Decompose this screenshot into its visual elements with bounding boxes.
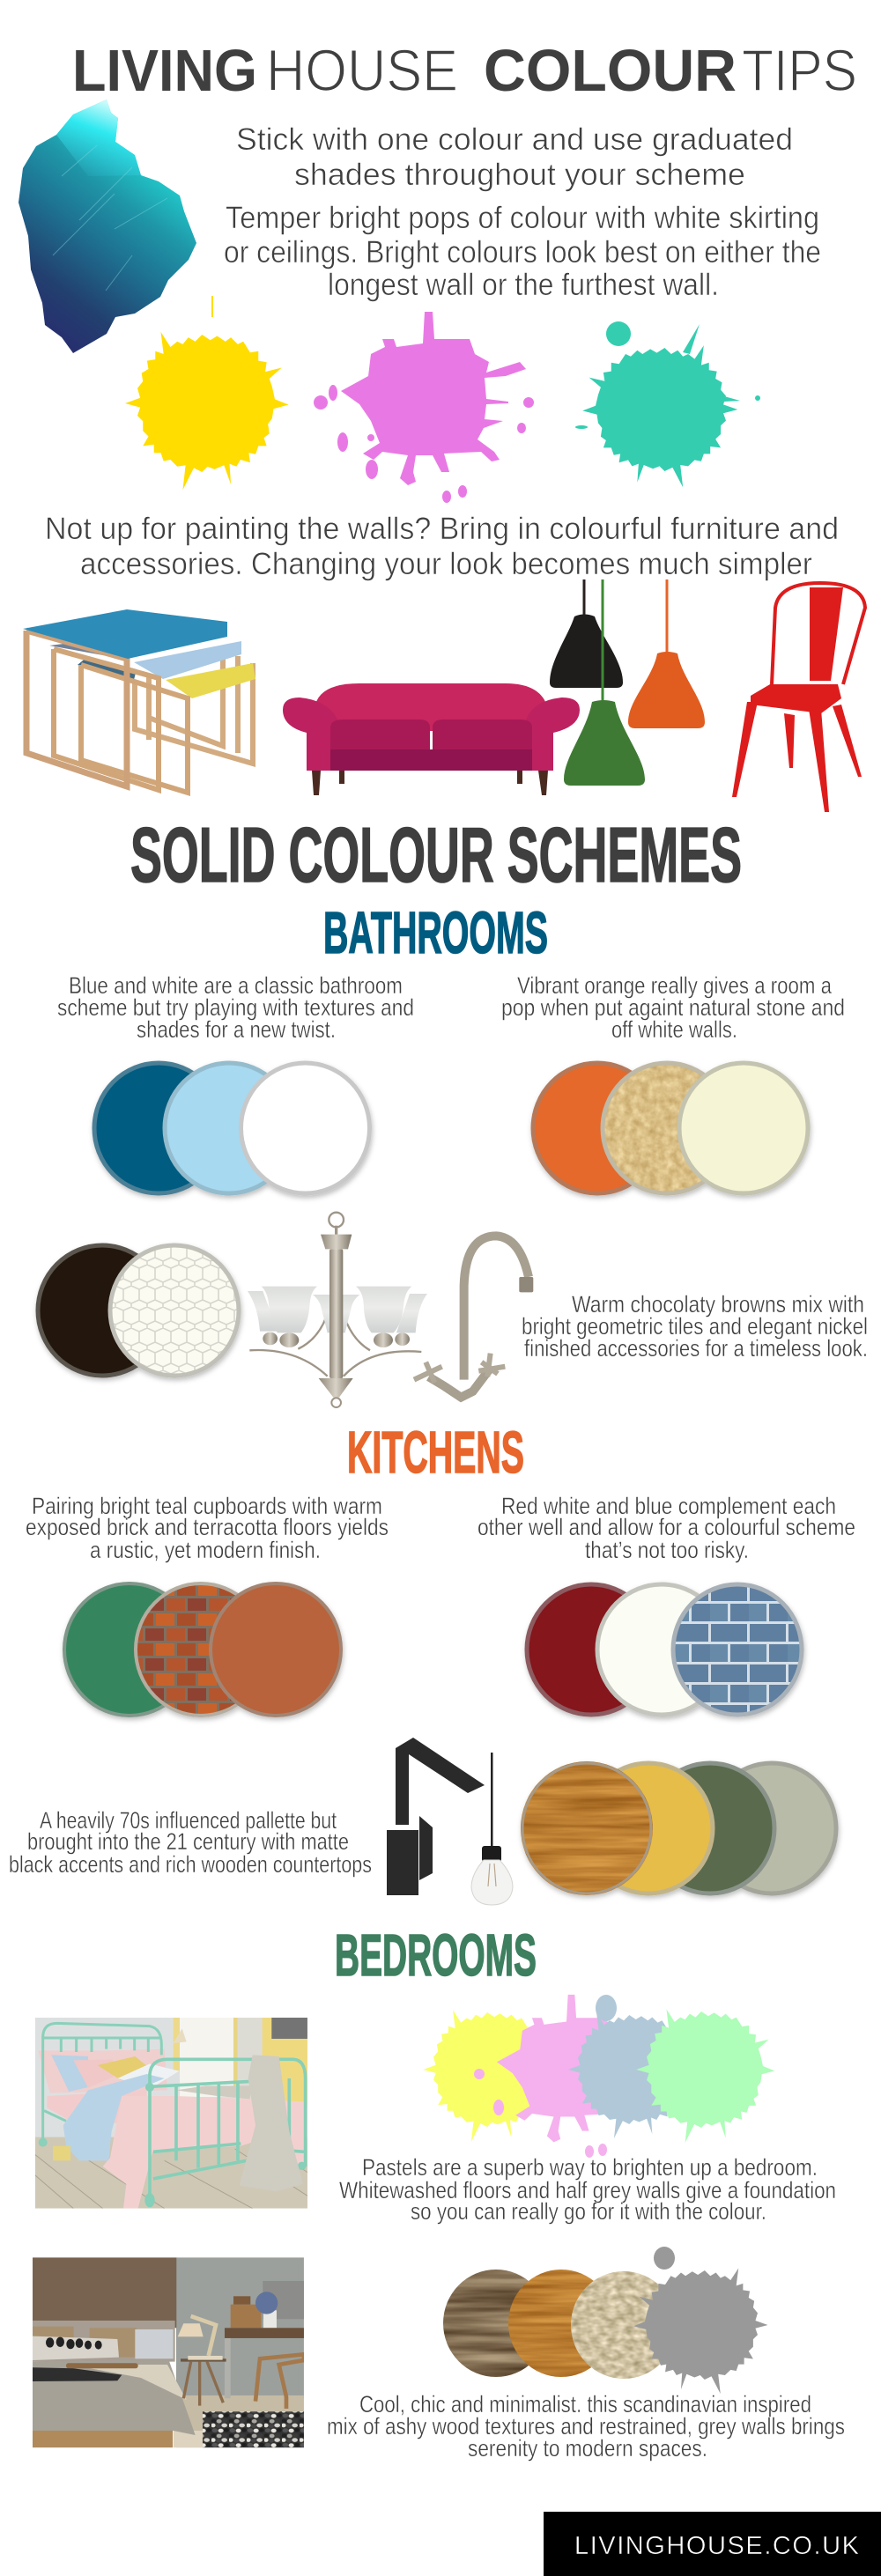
swatches: teal brick terracotta — [64, 1583, 341, 1716]
illustration: nesting tables — [23, 609, 255, 793]
text: teal cupboards: exposed brick and terracotta floors yields — [26, 1514, 389, 1540]
icon: yellow paint splat — [125, 296, 289, 490]
text: blue and white: scheme but try playing with textures and — [57, 994, 414, 1021]
swatches: pastel paint splats — [423, 1995, 774, 2158]
text: tip one colour: Stick with one colour and use graduated — [236, 122, 793, 157]
text: furniture tip: accessories. Changing your look becomes much simpler — [80, 547, 812, 581]
title: COLOUR — [484, 38, 737, 104]
illustration: green pendant lamp — [564, 579, 645, 786]
text: warm chocolaty browns — [522, 1291, 868, 1362]
title: TIPS — [742, 38, 857, 104]
footer: website badge: LIVINGHOUSE.CO.UK — [574, 2532, 860, 2560]
illustration: nickel tap — [414, 1236, 533, 1398]
illustration: black faucet — [387, 1738, 485, 1895]
swatches: wood wool grey splat — [443, 2247, 768, 2394]
footer: website badge — [544, 2512, 881, 2576]
text: vibrant orange — [501, 972, 845, 1043]
swatches: wood yellow green sage — [520, 1761, 836, 1895]
text: teal cupboards: Pairing bright teal cupboards with warm — [32, 1493, 382, 1519]
text: red white blue: that’s not too risky. — [585, 1537, 749, 1563]
text: tip one colour: shades throughout your scheme — [294, 158, 745, 192]
text: tip bright pops: Temper bright pops of colour with white skirting — [226, 201, 819, 235]
illustration: orange pendant lamp — [628, 579, 705, 728]
swatches: blue and white — [94, 1063, 370, 1193]
text: red white blue — [478, 1493, 855, 1563]
swatches: orange stone cream — [533, 1060, 808, 1196]
text: pastels: so you can really go for it with the colour. — [411, 2198, 766, 2225]
photo: scandinavian bedroom — [33, 2257, 304, 2447]
icon: blue paint brush stroke — [19, 100, 196, 353]
illustration: glass pendant — [471, 1753, 513, 1905]
text: blue and white: shades for a new twist. — [137, 1016, 336, 1043]
text: tip bright pops: longest wall or the furthest wall. — [328, 268, 719, 302]
heading: bedrooms: BEDROOMS — [335, 1923, 537, 1989]
swatches: red white blue tile — [527, 1584, 802, 1715]
illustration: red metal chair — [732, 583, 865, 812]
text: scandinavian — [327, 2391, 845, 2462]
title: HOUSE — [266, 38, 458, 104]
text: furniture tip — [45, 512, 839, 581]
text: pastels — [339, 2154, 836, 2225]
illustration: chandelier — [248, 1213, 427, 1407]
text: tip one colour — [236, 122, 793, 192]
illustration: black pendant lamp — [550, 579, 623, 688]
icon: teal paint splat — [575, 321, 760, 487]
text: seventies palette: black accents and rich wooden countertops — [9, 1851, 372, 1878]
photo: pastel bedroom — [35, 2018, 307, 2209]
text: seventies palette: brought into the 21 century with matte — [27, 1828, 349, 1855]
text: blue and white: Blue and white are a classic bathroom — [69, 972, 403, 999]
text: vibrant orange: off white walls. — [611, 1016, 737, 1043]
illustration: pink sofa — [283, 683, 580, 795]
text: teal cupboards: a rustic, yet modern finish. — [90, 1537, 321, 1563]
text: teal cupboards — [26, 1493, 389, 1563]
text: seventies palette — [9, 1807, 372, 1878]
text: scandinavian: serenity to modern spaces. — [468, 2435, 707, 2462]
swatches: brown and tile — [38, 1245, 239, 1376]
text: blue and white — [57, 972, 414, 1043]
title — [72, 38, 857, 104]
heading: kitchens: KITCHENS — [347, 1420, 524, 1486]
text: seventies palette: A heavily 70s influenced pallette but — [40, 1807, 337, 1834]
title: LIVING — [72, 38, 257, 104]
text: tip bright pops — [224, 201, 821, 302]
text: furniture tip: Not up for painting the walls? Bring in colourful furniture and — [45, 512, 839, 546]
text: tip bright pops: or ceilings. Bright colours look best on either the — [224, 235, 821, 269]
icon: pink paint splat — [314, 312, 534, 503]
heading: bathrooms: BATHROOMS — [323, 900, 548, 966]
